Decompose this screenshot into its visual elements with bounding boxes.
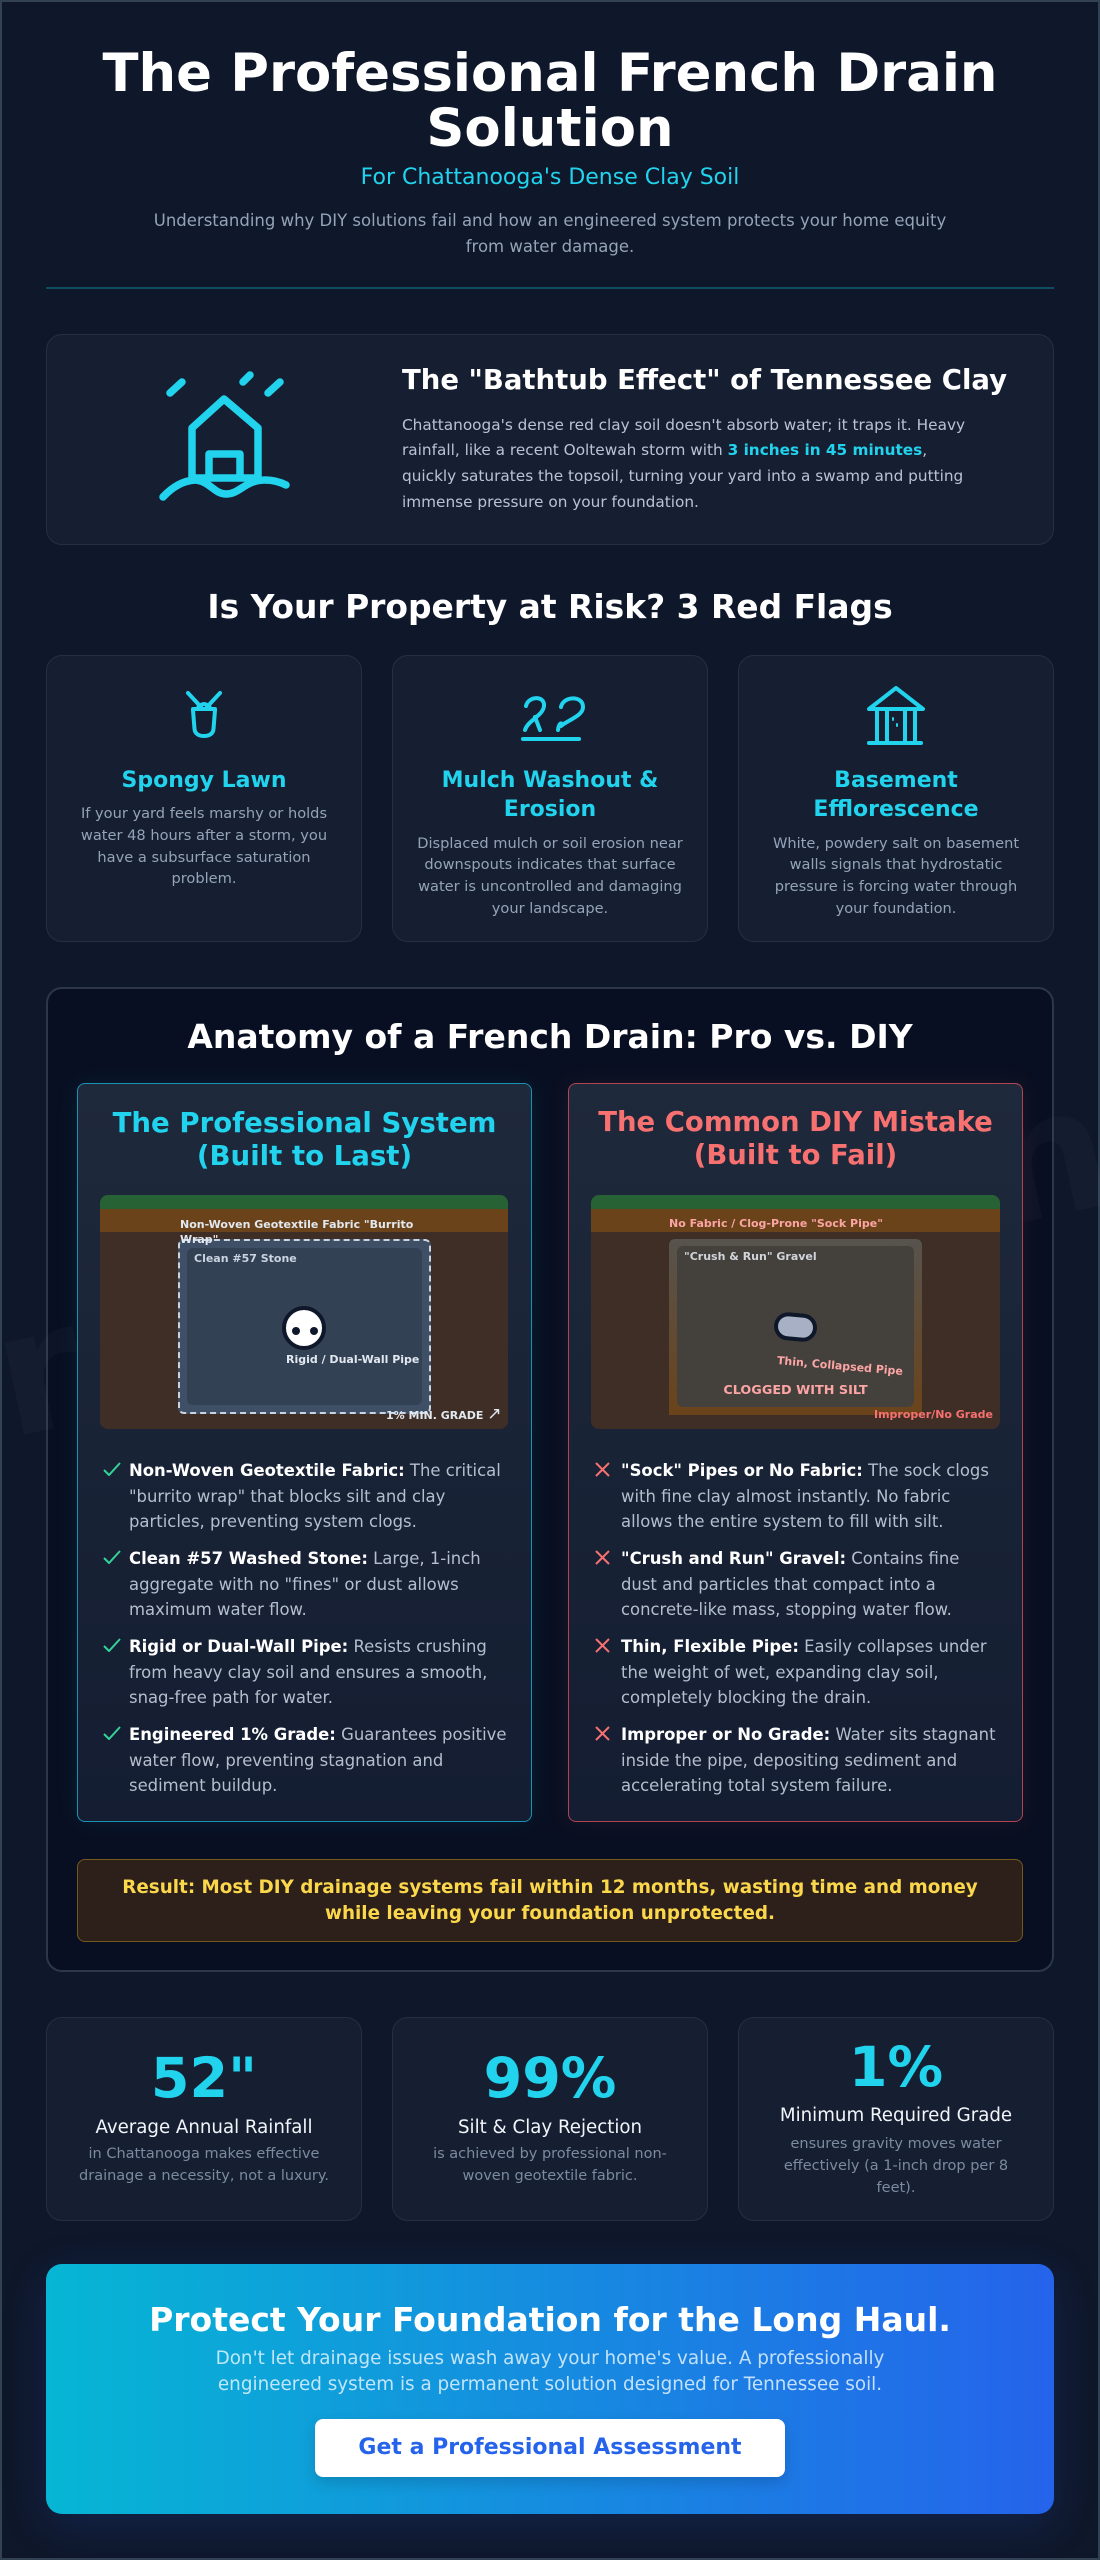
panel: basement efflorescence [738,655,1054,942]
text: downspouts indicates that surface [424,856,676,873]
button [315,2419,785,2477]
heading: Mulch Washout & [442,768,658,793]
icon: basement house [867,686,926,745]
panel: bathtub effect [46,334,1054,545]
collapsed pipe [773,1311,818,1343]
label: "Crush & Run" Gravel [684,1250,817,1263]
label: No Fabric / Clog-Prone "Sock Pipe" [669,1217,883,1230]
title [102,43,998,159]
heading [813,768,979,822]
label [180,1218,413,1246]
fabric wrap [178,1239,431,1414]
pipe [282,1306,326,1350]
list: pro features [103,1461,507,1795]
item: Engineered 1% Grade: Guarantees positive [129,1725,507,1744]
text: your landscape. [492,900,608,917]
item: Rigid or Dual-Wall Pipe: Resists crushing [129,1637,487,1656]
label: Thin, Collapsed Pipe [776,1354,903,1378]
label: Non-Woven Geotextile Fabric "Burrito [180,1218,413,1231]
text [417,834,683,917]
number: 99% [484,2046,616,2111]
panel: mulch washout [392,655,708,942]
label: Clean #57 Stone [194,1252,297,1265]
panel: DIY mistake [568,1083,1023,1822]
body text: Chattanooga's dense red clay soil doesn't absorb water; it traps it. Heavy [402,416,965,434]
panel: professional system [77,1083,532,1822]
item: water flow, preventing stagnation and [129,1751,443,1770]
title: Solution [426,98,674,159]
heading: Protect Your Foundation for the Long Haul. [149,2300,951,2339]
item: "burrito wrap" that blocks silt and clay [129,1487,445,1506]
heading [598,1106,993,1171]
gravel [677,1246,914,1407]
item: Thin, Flexible Pipe: Easily collapses under [621,1637,987,1656]
body text: immense pressure on your foundation. [402,493,699,511]
text [784,2136,1008,2196]
item: particles, preventing system clogs. [129,1512,417,1531]
heading: red flags: Is Your Property at Risk? 3 Red Flags [207,587,893,626]
list: DIY failures [595,1461,996,1795]
text: in Chattanooga makes effective [89,2146,319,2162]
item: from heavy clay soil and ensures a smooth, [129,1663,487,1682]
item: sediment buildup. [129,1776,277,1795]
stat: rainfall [46,2017,362,2221]
body text [402,416,965,511]
text [216,2348,884,2395]
text: If your yard feels marshy or holds [81,805,327,822]
item: the weight of wet, expanding clay soil, [621,1663,939,1682]
text: walls signals that hydrostatic [790,856,1002,873]
item: Improper or No Grade: Water sits stagnant [621,1725,996,1744]
text [79,2146,329,2184]
item [595,1461,989,1531]
stat: rejection [392,2017,708,2221]
intro text [154,211,946,256]
item [103,1637,487,1707]
stat: grade [738,2017,1054,2221]
panel: spongy lawn [46,655,362,942]
item: maximum water flow. [129,1600,307,1619]
heading: Spongy Lawn [122,768,286,793]
text: Displaced mulch or soil erosion near [417,834,683,852]
label: Wrap" [180,1233,218,1246]
header [102,43,998,256]
heading: Anatomy of a French Drain: Pro vs. DIY [187,1017,913,1056]
text [81,805,327,887]
callout: result: while leaving your foundation unprotected. [325,1903,775,1924]
text: White, powdery salt on basement [773,834,1019,852]
text: water is uncontrolled and damaging [418,878,682,895]
label: Average Annual Rainfall [95,2116,313,2138]
item: concrete-like mass, stopping water flow. [621,1600,952,1619]
call to action [46,2264,1054,2514]
item [103,1549,481,1619]
heading: The Professional System [113,1106,496,1139]
text: problem. [171,870,237,887]
icon: flooded house [159,371,290,501]
callout: result: Result: Most DIY drainage systems fail within 12 months, wasting time and money [122,1877,978,1898]
item: "Sock" Pipes or No Fabric: The sock clogs [621,1461,989,1480]
item [103,1461,501,1531]
text: water 48 hours after a storm, you [81,827,327,844]
text: Don't let drainage issues wash away your home's value. A professionally [216,2348,884,2369]
item: "Crush and Run" Gravel: Contains fine [621,1549,959,1568]
icon: erosion [521,696,585,741]
text [773,834,1019,917]
heading: Efflorescence [813,797,979,822]
heading: (Built to Last) [197,1139,412,1172]
heading: Erosion [504,797,596,822]
label: Silt & Clay Rejection [458,2116,642,2138]
body text: quickly saturates the topsoil, turning your yard into a swamp and putting [402,467,963,485]
heading: The Common DIY Mistake [598,1106,993,1138]
text: pressure is forcing water through [775,878,1017,895]
item: aggregate with no "fines" or dust allows [129,1575,459,1594]
label: Minimum Required Grade [780,2105,1012,2126]
text [433,2146,667,2184]
diagram: DIY cross-section [591,1195,1000,1429]
item [103,1725,507,1795]
text: feet). [877,2180,915,2196]
item: inside the pipe, depositing sediment and [621,1751,957,1770]
heading: Basement [834,768,958,793]
title: The Professional French Drain [102,43,998,104]
diagram: professional cross-section [100,1195,508,1429]
item: with fine clay almost instantly. No fabric [621,1487,950,1506]
number: 1% [849,2035,943,2100]
text: ensures gravity moves water [790,2136,1002,2152]
heading: (Built to Fail) [694,1139,897,1171]
label: Rigid / Dual-Wall Pipe [286,1353,419,1366]
button: Get a Professional Assessment [358,2435,742,2460]
item: allows the entire system to fill with silt. [621,1512,944,1531]
text: your foundation. [836,900,956,917]
item: accelerating total system failure. [621,1776,892,1795]
stone [187,1248,422,1405]
heading [442,768,658,822]
item: snag-free path for water. [129,1688,333,1707]
label: 1% MIN. GRADE ↗ [386,1404,502,1424]
subtitle: For Chattanooga's Dense Clay Soil [361,164,739,190]
item: Clean #57 Washed Stone: Large, 1-inch [129,1549,481,1568]
callout: result [77,1859,1023,1942]
number: 52" [151,2046,257,2111]
text: is achieved by professional non- [433,2146,667,2162]
heading [112,1106,496,1172]
item [595,1725,996,1795]
trench [669,1239,922,1415]
item: dust and particles that compact into a [621,1575,936,1594]
text: woven geotextile fabric. [462,2168,638,2184]
item [595,1549,959,1619]
text: have a subsurface saturation [97,849,311,866]
text: drainage a necessity, not a luxury. [79,2168,329,2184]
intro text: Understanding why DIY solutions fail and how an engineered system protects your home equity [154,211,946,230]
panel: anatomy comparison [46,987,1054,1972]
item: completely blocking the drain. [621,1688,871,1707]
item: Non-Woven Geotextile Fabric: The critical [129,1461,501,1480]
icon: sponge plant [186,690,222,738]
intro text: from water damage. [466,237,634,256]
text: engineered system is a permanent solution designed for Tennessee soil. [218,2374,882,2395]
text: effectively (a 1-inch drop per 8 [784,2158,1008,2174]
item [595,1637,987,1707]
label: CLOGGED WITH SILT [723,1383,868,1398]
body text: rainfall, like a recent Ooltewah storm with 3 inches in 45 minutes, [402,441,927,459]
heading: The "Bathtub Effect" of Tennessee Clay [402,364,1007,396]
label: Improper/No Grade [874,1408,993,1421]
